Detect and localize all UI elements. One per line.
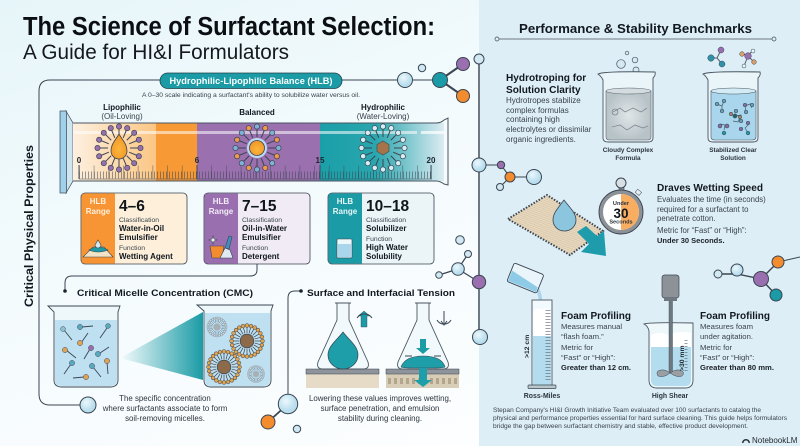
footer paragraph: physical and performance properties essential for hard surface cleaning. This guide helps formulators — [493, 415, 787, 422]
HLB scale tube: 15 — [316, 156, 325, 165]
foam profiling text 1: Foam Profiling — [561, 311, 631, 322]
High Shear mixer — [644, 275, 693, 388]
illustration: pouring beaker — [507, 263, 544, 308]
foam profiling text 2: Metric for — [700, 343, 732, 352]
surface: low tension flask — [386, 303, 459, 388]
foam profiling text 2 — [700, 311, 774, 372]
HLB scale tube: 6 — [195, 156, 200, 165]
hydrotroping text: electrolytes or dissimilar — [506, 125, 592, 134]
HLB card: 4-6: 4–6 — [119, 198, 145, 215]
draves text: Draves Wetting Speed — [657, 183, 763, 194]
connector: surface tension — [288, 289, 303, 395]
molecule: divider lower left — [436, 236, 486, 289]
label: clear — [709, 147, 757, 162]
label: cloudy: Cloudy Complex — [603, 147, 654, 154]
label: 30 mm: >30 mm — [679, 345, 686, 371]
HLB scale tube — [60, 111, 448, 193]
HLB card: 10-18: HLB — [337, 197, 353, 206]
footer paragraph — [493, 407, 787, 430]
label: clear: Stabilized Clear — [709, 147, 757, 154]
HLB card: 4-6: Function — [119, 245, 145, 252]
micelle: hydrophilic — [352, 117, 414, 179]
HLB card: 10-18 — [328, 193, 434, 264]
HLB tube labels: Hydrophilic — [361, 103, 406, 112]
HLB card: 7-15: Oil-in-Water — [242, 224, 287, 233]
frame end bubble — [80, 397, 96, 413]
foam profiling text 1: Metric for — [561, 343, 593, 352]
CMC description: where surfactants associate to form — [102, 404, 228, 413]
left frame connector — [39, 80, 160, 405]
HLB card: 7-15: Classification — [242, 217, 282, 224]
HLB card: 7-15: Function — [242, 245, 268, 252]
icon: bucket and brush — [209, 236, 233, 258]
label: High Shear: High Shear — [652, 393, 689, 400]
foam profiling text 2: under agitation. — [700, 332, 753, 341]
footer paragraph: Stepan Company's HI&I Growth Initiative Team evaluated over 100 surfactants to catalog the — [493, 407, 762, 414]
CMC description: soil-removing micelles. — [125, 414, 205, 423]
right panel background — [479, 0, 800, 446]
footer paragraph: bridge the gap between surfactant chemistry and stable, effective product development. — [493, 423, 748, 430]
HLB card: 4-6: Wetting Agent — [119, 252, 173, 261]
label: clear: Solution — [720, 155, 746, 162]
hydrotroping text: Hydrotroping for — [506, 73, 586, 84]
HLB card: 7-15: Range — [209, 207, 234, 216]
surface description — [309, 394, 451, 423]
HLB card: 7-15 — [204, 193, 310, 264]
icon: water drop — [553, 200, 576, 231]
HLB card: 4-6: Range — [86, 207, 111, 216]
foam profiling text 2: Measures foam — [700, 322, 753, 331]
stopwatch: 30 — [613, 206, 629, 221]
surface description: surface penetration, and emulsion — [321, 404, 439, 413]
title: The Science of Surfactant Selection: — [23, 13, 435, 41]
foam profiling text 1: Measures manual — [561, 322, 622, 331]
Ross-Miles cylinder — [528, 300, 556, 388]
hydrotroping text — [506, 73, 592, 144]
illustration: cotton swatch — [508, 195, 603, 255]
molecule: top right of HLB — [342, 58, 470, 102]
surface: high tension flask — [306, 303, 379, 388]
HLB card: 4-6 — [81, 193, 187, 264]
HLB card: 4-6: Emulsifier — [119, 233, 158, 242]
draves text: Metric for “Fast” or “High”: — [657, 226, 747, 235]
beaker: micelles formed — [197, 305, 273, 391]
stopwatch: Seconds — [609, 220, 633, 226]
beaker: free surfactants — [48, 306, 120, 387]
HLB card: 4-6: HLB — [90, 197, 106, 206]
foam profiling text 1: “Fast” or “High”: — [561, 353, 615, 362]
HLB tube labels: Balanced — [239, 108, 275, 117]
molecule: lower right — [714, 256, 800, 301]
title — [23, 13, 435, 64]
label: 12 cm: >12 cm — [524, 335, 531, 358]
HLB card: 10-18: Function — [366, 236, 392, 243]
HLB card: 7-15: Detergent — [242, 252, 280, 261]
molecule: divider right — [486, 161, 542, 190]
HLB scale tube: 0 — [77, 156, 82, 165]
HLB card: 10-18: Classification — [366, 217, 406, 224]
foam profiling text 2: Greater than 80 mm. — [700, 363, 774, 372]
divider spine with nodes — [472, 54, 488, 344]
HLB heading pill: Hydrophilic-Lipophilic Balance (HLB) — [170, 76, 332, 86]
hydrotroping text: organic ingredients. — [506, 135, 576, 144]
beaker: cloudy — [598, 51, 655, 142]
hydrotroping text: containing high — [506, 115, 560, 124]
HLB card: 10-18: Range — [333, 207, 358, 216]
heading: CMC: Critical Micelle Concentration (CMC) — [77, 288, 253, 298]
draves text: Under 30 Seconds. — [657, 236, 725, 245]
heading: surface tension: Surface and Interfacial Tension — [307, 288, 455, 298]
HLB tube labels — [101, 103, 410, 121]
draves text: required for a surfactant to — [657, 205, 749, 214]
surface description: stability during cleaning. — [338, 414, 422, 423]
foam profiling text 2: “Fast” or “High”: — [700, 353, 754, 362]
HLB card: 10-18: Solubility — [366, 252, 403, 261]
CMC description — [102, 394, 228, 423]
foam profiling text 2: Foam Profiling — [700, 311, 770, 322]
HLB card: 7-15: 7–15 — [242, 198, 277, 215]
stopwatch: Under — [613, 201, 630, 207]
draves text: penetrate cotton. — [657, 214, 716, 223]
beaker: clear — [703, 72, 760, 142]
HLB scale tube: 20 — [427, 156, 436, 165]
HLB description: A 0–30 scale indicating a surfactant's ability to solubilize water versus oil. — [142, 92, 360, 99]
foam profiling text 1 — [561, 311, 631, 372]
icon: wetting surface — [83, 240, 113, 257]
HLB tube labels: (Water-Loving) — [357, 112, 410, 121]
vertical heading: critical physical properties: Critical Physical Properties — [24, 145, 36, 307]
HLB heading pill — [160, 73, 342, 88]
label: Ross-Miles: Ross-Miles — [524, 393, 560, 400]
micelle: lipophilic — [88, 117, 150, 179]
heading: performance — [495, 21, 776, 41]
hydrotroping text: complex formulas — [506, 106, 569, 115]
HLB card: 4-6: Water-in-Oil — [119, 224, 164, 233]
HLB card: 10-18: High Water — [366, 243, 408, 252]
label: cloudy — [603, 147, 654, 162]
foam profiling text 1: Greater than 12 cm. — [561, 363, 631, 372]
HLB card: 10-18: Solubilizer — [366, 224, 406, 233]
surface description: Lowering these values improves wetting, — [309, 394, 451, 403]
HLB card: 10-18: 10–18 — [366, 198, 409, 215]
hydrotroping text: Hydrotropes stabilize — [506, 96, 581, 105]
foam profiling text 1: “flash foam.” — [561, 332, 604, 341]
HLB card: 4-6: Classification — [119, 217, 159, 224]
icon: water beaker — [337, 239, 352, 258]
connector: HLB cards to CMC — [63, 264, 257, 293]
molecule: bottom left — [261, 394, 301, 433]
draves text: Evaluates the time (in seconds) — [657, 195, 766, 204]
zoom cone — [120, 312, 203, 380]
arrow: wetting penetration — [577, 226, 606, 256]
HLB card: 7-15: HLB — [213, 197, 229, 206]
NotebookLM mark: NotebookLM — [752, 436, 798, 445]
HLB tube labels: Lipophilic — [103, 103, 141, 112]
micelle: balanced — [226, 117, 288, 179]
title: A Guide for HI&I Formulators — [23, 40, 289, 64]
heading: performance: Performance & Stability Benchmarks — [519, 21, 752, 36]
stopwatch — [599, 178, 643, 234]
HLB card: 7-15: Emulsifier — [242, 233, 281, 242]
HLB tube labels: (Oil-Loving) — [101, 112, 143, 121]
hydrotroping text: Solution Clarity — [506, 85, 581, 96]
molecules above clear beaker — [708, 47, 756, 68]
draves text — [657, 183, 766, 245]
CMC description: The specific concentration — [119, 394, 211, 403]
label: cloudy: Formula — [615, 155, 641, 162]
